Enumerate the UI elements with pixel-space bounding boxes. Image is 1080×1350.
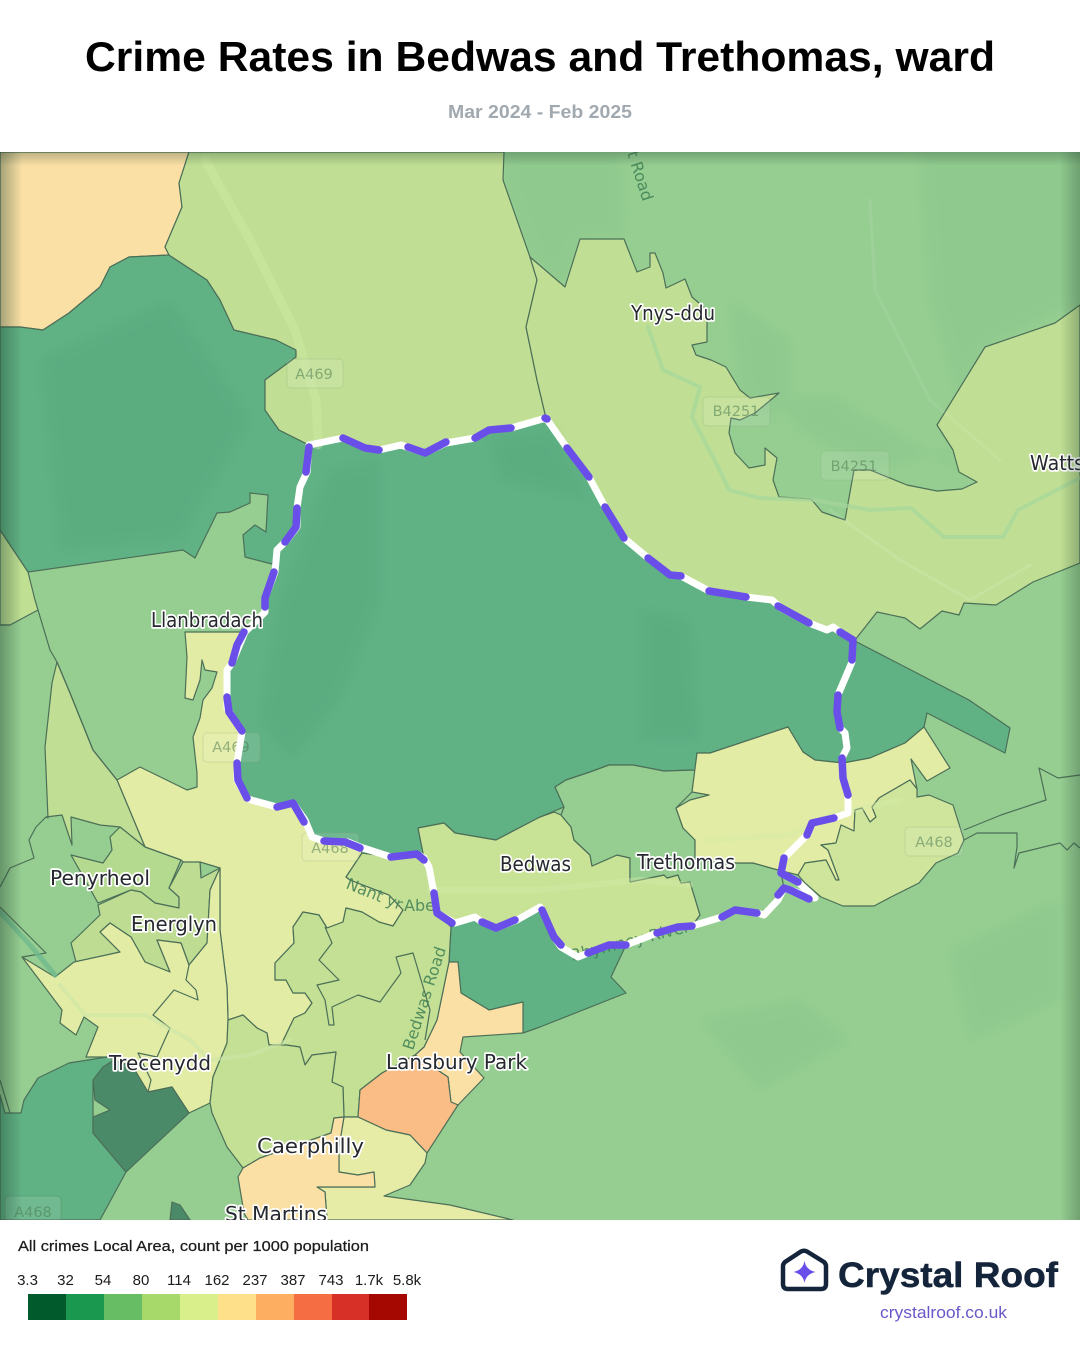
region: far west strip [0, 530, 38, 625]
legend scale labels: 743 [318, 1272, 344, 1289]
legend scale labels: 3.3 [17, 1272, 38, 1289]
road name: Bedwas Road: Bedwas Road [399, 944, 450, 1052]
ward outline: purple dashes [227, 418, 853, 953]
legend [17, 1238, 422, 1320]
road name: Rhymney River: Rhymney River [568, 917, 692, 965]
ward boundary lines [0, 610, 1080, 1113]
legend scale labels: 54 [95, 1272, 111, 1289]
place label: Trethomas: Trethomas [636, 850, 735, 874]
region: south-west dark green [0, 1057, 126, 1220]
region: small dark patch [170, 1202, 190, 1220]
road shield: A469 north [287, 359, 343, 388]
place label: Llanbradach: Llanbradach [151, 608, 263, 632]
map edge vignette [0, 152, 1080, 1220]
region: Lansbury orange [358, 1055, 458, 1153]
road shield: A468 centre [302, 833, 359, 861]
place label: Lansbury Park: Lansbury Park [386, 1050, 527, 1074]
region: Trecenydd pale yellow [22, 868, 228, 1113]
road shield: B4251 [703, 397, 770, 426]
forest shading on eastern hills [503, 152, 1080, 1090]
wordmark: Crystal Roof [838, 1256, 1058, 1295]
region: ward dark green [227, 418, 1010, 858]
region: south pale yellow [317, 1117, 513, 1220]
region: central lime [275, 853, 451, 1117]
road name: Nant yr: Nant yr [344, 874, 406, 914]
legend scale labels: 32 [57, 1272, 74, 1289]
road shield: B4251 east: B4251 [831, 459, 877, 475]
road shield: A468 east: A468 [915, 835, 953, 851]
region: Caerphilly lime [210, 1015, 344, 1168]
region: north lime [165, 152, 546, 453]
legend scale labels: 114 [167, 1272, 191, 1289]
road shield: A469 centre [203, 733, 260, 762]
region: Caerphilly tan [238, 1117, 375, 1220]
region: east lobe lime [798, 780, 964, 906]
legend scale labels [17, 1272, 422, 1289]
legend scale labels: 1.7k [355, 1272, 384, 1289]
region: Bedwas lime [418, 812, 700, 957]
region: west lime [45, 662, 145, 847]
rivers and roads [0, 325, 1080, 1062]
region: west dark green [0, 255, 309, 572]
legend scale labels: 80 [133, 1272, 149, 1289]
website url: crystalroof.co.uk [880, 1304, 1008, 1322]
road shield: A469 centre: A469 [212, 740, 250, 756]
legend title: All crimes Local Area, count per 1000 population [18, 1238, 369, 1255]
road shield: A468 south-west [4, 1196, 62, 1220]
region: darkest green [93, 1060, 189, 1172]
road shield: A468 south-west: A468 [14, 1205, 52, 1221]
region: north-west tan [0, 152, 189, 330]
legend scale labels: 237 [242, 1272, 268, 1289]
place label: Bedwas: Bedwas [500, 852, 571, 876]
region: Penyrheol lime [71, 827, 181, 908]
place label: Energlyn: Energlyn [131, 912, 217, 936]
road shield: A468 centre: A468 [311, 841, 349, 857]
region: Trethomas pale yellow [676, 727, 950, 880]
region: Llanbradach and central pale yellow [117, 632, 403, 1045]
region: Lansbury Park tan [415, 962, 523, 1105]
woodland shading inside the ward [40, 300, 700, 760]
road name: Abe: Abe [404, 896, 435, 915]
region: west Trethomas medium green [555, 765, 784, 926]
region: dark patch south of Bedwas [449, 907, 626, 1033]
place label: Trecenydd: Trecenydd [108, 1051, 211, 1075]
legend colour bar [28, 1294, 407, 1320]
choropleth map [0, 148, 1080, 1226]
title: Crime Rates in Bedwas and Trethomas, ward [85, 33, 995, 80]
legend scale labels: 162 [204, 1272, 230, 1289]
logo: Crystal Roof [783, 1251, 1058, 1322]
road shield: A468 east [905, 827, 963, 856]
place label: Caerphilly: Caerphilly [257, 1134, 364, 1158]
region: Energlyn lime [71, 862, 220, 972]
road name: t Road: t Road [623, 148, 657, 203]
ward outline: white casing [227, 418, 853, 957]
subtitle: date range: Mar 2024 - Feb 2025 [448, 102, 632, 122]
place label: Penyrheol: Penyrheol [50, 866, 150, 890]
icon: house with star [783, 1251, 826, 1289]
road shield: B4251 east [821, 451, 889, 480]
legend scale labels: 387 [280, 1272, 306, 1289]
place label: St Martins: St Martins [225, 1202, 327, 1226]
place label: Ynys-ddu: Ynys-ddu [630, 301, 715, 325]
road shield: A469 north: A469 [295, 367, 333, 383]
region: eastern valley lime [526, 239, 1080, 640]
road shield: B4251: B4251 [713, 404, 759, 420]
legend scale labels: 5.8k [393, 1272, 422, 1289]
